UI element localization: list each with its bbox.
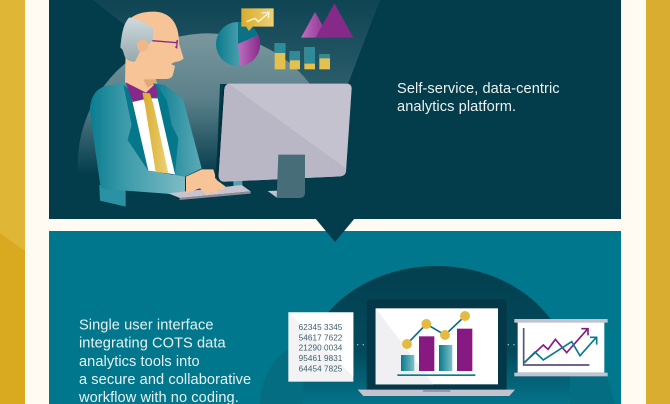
laptop [358, 299, 515, 396]
illustration: tools to interface [260, 266, 614, 404]
bar and line chart [397, 311, 475, 376]
data sheet: 95461 9831 [299, 354, 343, 363]
glasses [152, 40, 177, 48]
background hills [260, 266, 614, 404]
icon: pie chart [216, 22, 260, 66]
panel: self-service platform [49, 0, 621, 242]
monitor [215, 84, 352, 198]
text: single user interface: Single user interface [79, 318, 214, 334]
icon: trend callout [241, 8, 274, 31]
tie [142, 93, 168, 173]
data sheet [288, 312, 353, 382]
panel: self-service platform: analytics platform. [397, 99, 516, 115]
text: single user interface: integrating COTS data [79, 336, 226, 352]
connector dots [357, 344, 515, 345]
hand [186, 169, 226, 195]
illustration: analyst at computer [90, 3, 353, 207]
left gold band [0, 0, 25, 404]
ear [137, 39, 149, 52]
man [90, 12, 202, 207]
hair [120, 17, 153, 62]
text: single user interface: a secure and collaborative [79, 372, 251, 388]
text: single user interface: analytics tools into [79, 354, 200, 370]
presentation board [514, 319, 608, 376]
spotlight dome [78, 33, 310, 200]
lapels [123, 85, 178, 173]
text: single user interface [78, 318, 251, 404]
jacket right side [153, 83, 202, 177]
shirt [132, 98, 175, 174]
light beam [93, 0, 380, 84]
text: self-service: Self-service, data-centric [397, 81, 560, 97]
icon: mountain triangles [301, 3, 353, 38]
data sheet: 21290 0034 [299, 344, 343, 353]
collar [126, 82, 158, 102]
neck and head [125, 12, 184, 95]
jacket lower body [99, 185, 126, 207]
data sheet: 64454 7825 [299, 364, 343, 373]
icon: stacked bars [275, 43, 330, 69]
right gold band [646, 0, 670, 404]
panel: single user interface [49, 231, 621, 404]
data sheet: 54617 7622 [299, 333, 343, 342]
pointer triangle [315, 218, 355, 242]
keyboard [168, 181, 251, 200]
left arm [90, 82, 185, 195]
data sheet: 62345 3345 [299, 323, 343, 332]
